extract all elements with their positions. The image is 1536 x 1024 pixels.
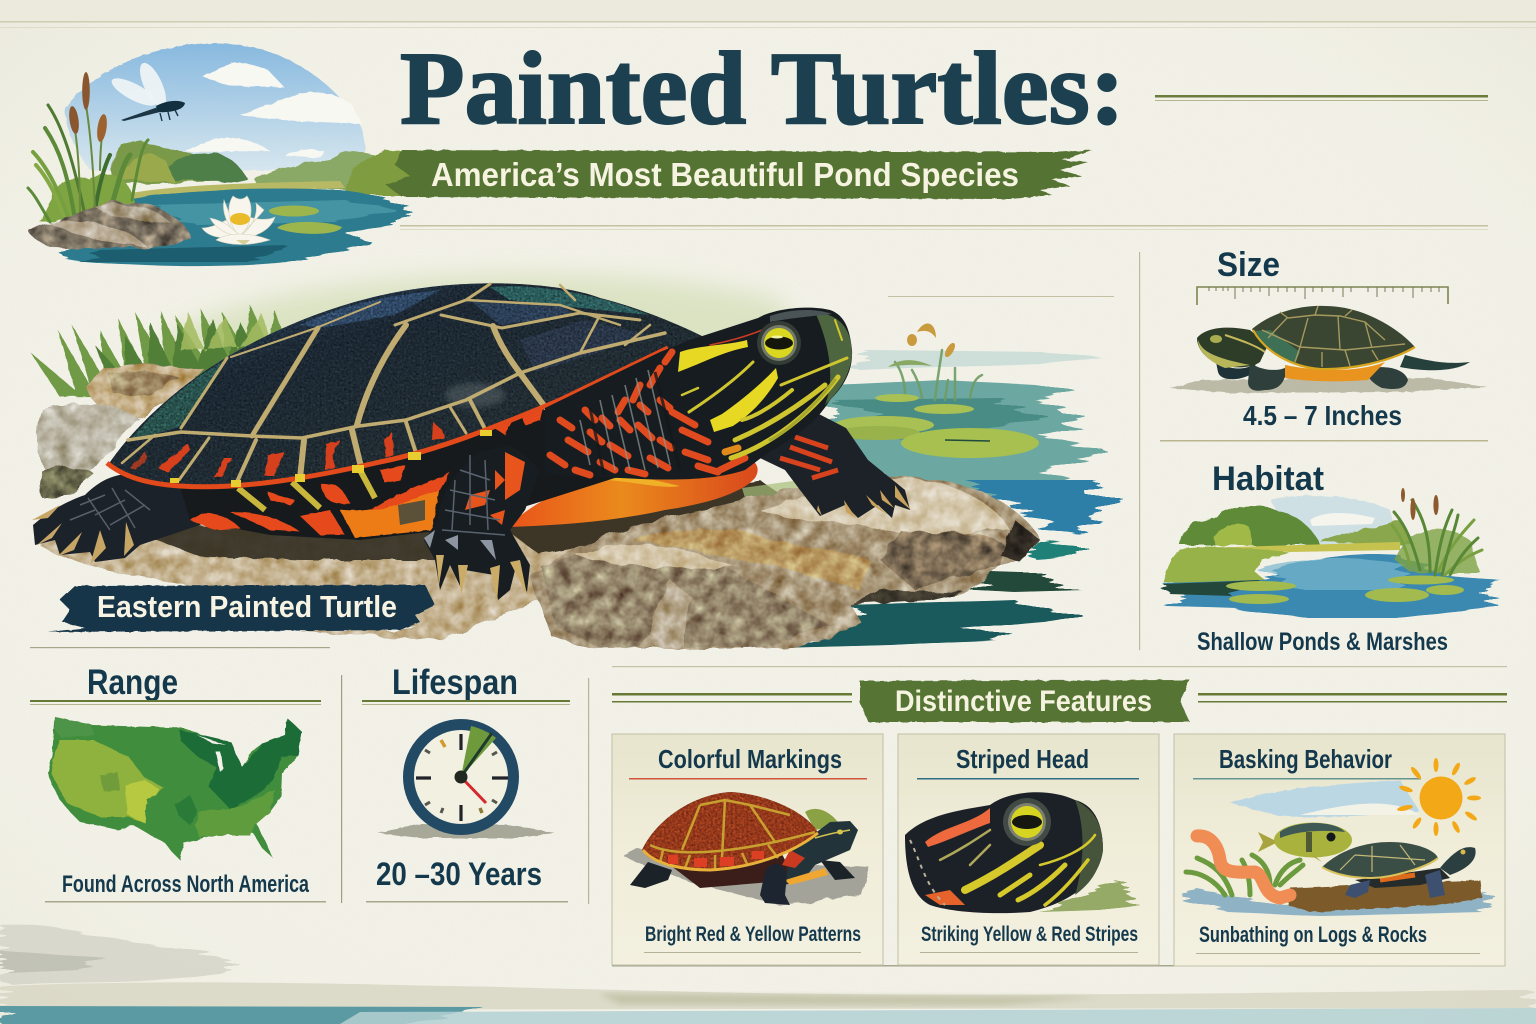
sun [1397, 758, 1481, 836]
scute seams [122, 284, 665, 484]
sky wash [1230, 780, 1420, 817]
brush stroke [386, 150, 1092, 199]
dragonfly [108, 59, 185, 121]
caption: range: Found Across North America [62, 871, 309, 898]
sheen [445, 383, 505, 407]
value: lifespan: 20 –30 Years [376, 856, 542, 892]
ribbon [860, 680, 1190, 722]
water lily [202, 196, 342, 245]
clouds [185, 63, 362, 158]
illustration: striped head [905, 792, 1135, 913]
shell rim [107, 348, 668, 487]
main turtle scene [30, 274, 1108, 650]
heading: Basking Behavior [1219, 744, 1392, 774]
name banner [48, 585, 435, 632]
panel: size [1170, 246, 1488, 431]
shell [107, 283, 706, 487]
heading: habitat: Habitat [1212, 460, 1324, 498]
panel: distinctive features [612, 666, 1507, 966]
neck and head [545, 308, 852, 480]
teal scute highlights [130, 360, 225, 440]
panel: range [30, 663, 326, 902]
plastron [510, 458, 758, 527]
sky [65, 43, 366, 170]
name banner: Eastern Painted Turtle [97, 589, 397, 624]
card: basking behavior [1174, 734, 1505, 966]
caption: Striking Yellow & Red Stripes [921, 923, 1138, 946]
container bottom edge [612, 965, 1505, 966]
divider above range [30, 647, 330, 648]
turtle on log [1322, 842, 1476, 898]
marginal red blotches [130, 422, 445, 478]
head stripes [678, 340, 778, 432]
main rock [530, 476, 1040, 650]
caption: Sunbathing on Logs & Rocks [1199, 922, 1427, 947]
heading: size: Size [1217, 246, 1280, 284]
map: north america range [48, 717, 302, 860]
neck red stripes [550, 352, 745, 475]
card: colorful markings [612, 734, 883, 965]
features rules [612, 693, 1507, 702]
bulrush and cattails [40, 173, 135, 222]
illustration: red turtle [625, 792, 870, 905]
bottom watercolor shoreline [0, 925, 1536, 1024]
lily pads [834, 394, 1039, 458]
pond vignette [28, 43, 420, 266]
backdrop haze [160, 274, 800, 420]
heading: Striped Head [956, 744, 1089, 774]
ruler [1197, 287, 1448, 305]
heading rule [362, 700, 570, 705]
heading: Colorful Markings [658, 744, 842, 774]
heading: lifespan: Lifespan [392, 663, 518, 702]
card: striped head [898, 734, 1159, 965]
divider: lifespan and features [588, 678, 589, 904]
caption: Bright Red & Yellow Patterns [645, 923, 861, 946]
meadow bank [120, 181, 345, 200]
sandy ground [40, 515, 620, 640]
heading rule [30, 700, 321, 705]
clock icon [378, 719, 555, 838]
rear leg [32, 474, 215, 565]
rock [30, 202, 192, 249]
fish [1258, 822, 1352, 862]
value: habitat: Shallow Ponds & Marshes [1197, 628, 1448, 656]
pale gap with grass under the neck [742, 480, 810, 500]
divider: range and lifespan [341, 675, 342, 903]
heading: range: Range [87, 663, 178, 702]
reeds at water [895, 350, 982, 400]
upper rule in scene [888, 296, 1114, 297]
body under shell [175, 345, 640, 540]
divider: right column [1139, 252, 1140, 650]
divider: size and habitat [1160, 440, 1488, 442]
panel: lifespan [362, 663, 570, 902]
illustration: basking scene [1185, 758, 1493, 916]
subtitle banner [386, 150, 1092, 199]
section rule [400, 225, 1488, 230]
front far leg [760, 412, 911, 518]
title: Painted Turtles: [400, 31, 1125, 146]
grass [30, 305, 285, 397]
subtitle text: America’s Most Beautiful Pond Species [431, 156, 1019, 193]
title rule right [1155, 95, 1488, 101]
panel: habitat [1163, 460, 1495, 656]
water [60, 188, 410, 266]
right water [780, 350, 1108, 648]
background rocks [37, 364, 205, 498]
icon: small turtle [1170, 306, 1488, 393]
far trees [110, 140, 420, 195]
value: size: 4.5 – 7 Inches [1243, 400, 1402, 431]
eye [757, 321, 801, 365]
grass tuft [1186, 855, 1303, 895]
front near leg [424, 445, 540, 602]
log [1288, 880, 1482, 912]
heading: distinctive features: Distinctive Features [895, 685, 1152, 718]
pond scene [1163, 488, 1495, 618]
water wash [1185, 888, 1493, 916]
worm [1197, 836, 1290, 898]
